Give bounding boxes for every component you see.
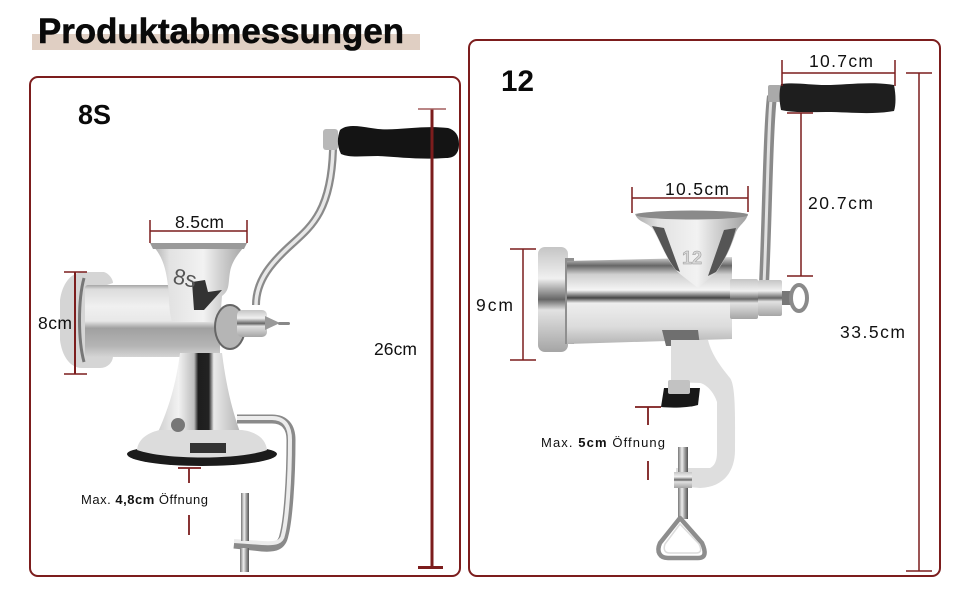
meat grinder 12 illustration [538,83,896,558]
dimension: max opening 5cm [541,407,665,480]
dimension: 20.7cm arm: 20.7cm [808,193,873,213]
title: Produktabmessungen [38,12,404,51]
dimension: 9cm height: 9cm [476,295,513,315]
panel: model 8S [30,77,460,576]
dimension: max opening 4,8cm [81,468,208,535]
meat grinder 12 illustration: 12 [682,248,702,268]
dimension: 33.5cm total height: 33.5cm [840,322,905,342]
dimension: 9cm height [476,249,536,360]
dimension: 10.5cm width [632,179,748,213]
dimension: 8cm height: 8cm [38,313,72,333]
dimension: 10.5cm width: 10.5cm [665,179,729,199]
dimension: 8cm height [38,272,87,374]
dimension: 8.5cm width: 8.5cm [175,212,224,232]
model label 12: 12 [501,65,534,98]
dimension: 33.5cm total height [840,73,932,571]
dimension: max opening 5cm: Max. 5cm Öffnung [541,435,665,450]
dimension: 20.7cm arm [787,113,873,276]
dimension: 26cm total height: 26cm [374,339,417,359]
dimension: 10.7cm handle [782,51,895,86]
panel: model 12 [469,40,940,576]
model label 8S: 8S [78,99,111,130]
dimension: 10.7cm handle: 10.7cm [809,51,873,71]
dimension: max opening 4,8cm: Max. 4,8cm Öffnung [81,492,208,507]
meat grinder 8S illustration [60,126,459,572]
meat grinder 8S illustration: 8s [171,263,199,293]
dimension: 8.5cm width [150,212,247,243]
